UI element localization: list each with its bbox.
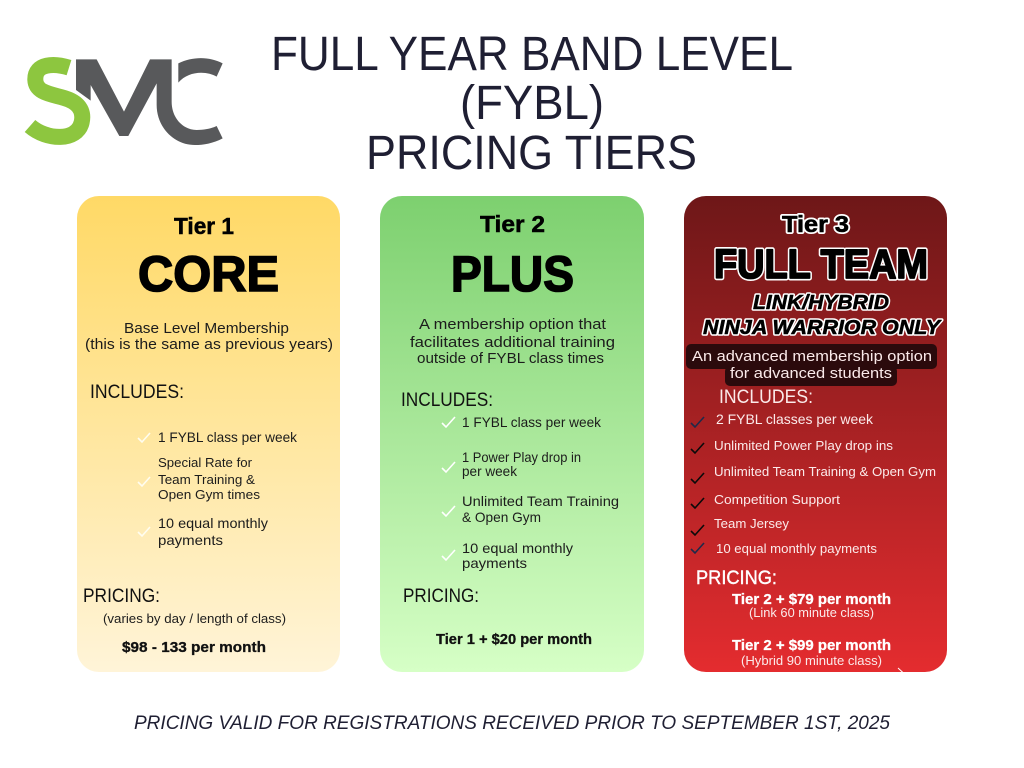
heading: Plus: PLUS [451,246,574,302]
includes list [138,429,298,548]
subheading: programs: LINK/HYBRID [753,292,889,314]
includes heading: INCLUDES: [90,382,184,403]
includes list [691,411,936,556]
includes list [442,414,619,571]
subheading: programs: NINJA WARRIOR ONLY [703,317,942,339]
heading: Full Team: FULL TEAM [714,241,928,287]
pricing heading: PRICING: [83,586,160,607]
includes list: 1 FYBL class per week [462,414,602,430]
logo: SMC [30,58,223,145]
pricing note: (varies by day / length of class) [103,611,286,626]
description: outside of FYBL class times [417,351,604,367]
description: A membership option that [419,317,606,333]
includes heading: INCLUDES: [719,387,813,408]
title: (FYBL) [460,77,604,130]
includes list: 10 equal monthly payments [716,541,878,556]
includes list: Unlimited Team Training & Open Gym [714,464,936,479]
pricing details [732,592,891,668]
heading: Full Team: FULL TEAM [714,241,928,287]
pricing heading: PRICING: [403,586,479,607]
panel: Tier 3 Full Team [684,196,947,674]
includes list: Team Jersey [714,516,789,531]
includes list: 1 Power Play drop in [462,449,581,465]
subheading: programs [703,292,942,339]
includes list: 10 equal monthly [462,540,573,556]
subheading: programs: LINK/HYBRID [753,292,889,314]
heading: Tier 2: Tier 2 [480,211,545,237]
includes list: Open Gym times [158,487,261,502]
includes list: per week [462,463,518,479]
includes list: Competition Support [714,492,840,507]
pricing heading: PRICING: [696,568,777,589]
price: Tier 1 + $20 per month [436,632,592,648]
description callout: An advanced membership option [692,349,932,365]
title [271,28,793,180]
description: Base Level Membership [124,321,289,337]
includes list: payments [158,532,223,548]
pricing details: Tier 2 + $99 per month [732,638,891,654]
heading: Core: CORE [138,246,279,302]
pricing details: Tier 2 + $79 per month [732,592,891,608]
includes list: Team Training & [158,472,255,487]
description [85,321,333,353]
pricing details: (Hybrid 90 minute class) [741,653,882,668]
title: PRICING TIERS [366,127,697,180]
includes list: 10 equal monthly [158,515,268,531]
description callout [686,344,937,386]
description [410,317,615,367]
subheading: programs: NINJA WARRIOR ONLY [703,317,942,339]
footer note: PRICING VALID FOR REGISTRATIONS RECEIVED PRIOR TO SEPTEMBER 1ST, 2025 [134,712,890,734]
price: $98 - 133 per month [122,640,266,656]
includes heading: INCLUDES: [401,390,493,411]
pricing details: (Link 60 minute class) [749,605,874,620]
description callout: for advanced students [730,366,892,382]
title: FULL YEAR BAND LEVEL [271,28,793,81]
includes list: payments [462,555,527,571]
includes list: Unlimited Team Training [462,493,619,509]
includes list: 2 FYBL classes per week [716,411,874,427]
includes list: Special Rate for [158,455,253,470]
panel: Tier 1 Core [77,196,340,672]
icon: clipped check fragment [898,668,904,674]
description: facilitates additional training [410,335,615,351]
panel: Tier 2 Plus [380,196,644,672]
heading: Tier 3: Tier 3 [782,211,849,237]
includes list: 1 FYBL class per week [158,429,298,445]
includes list: & Open Gym [462,509,541,525]
description: (this is the same as previous years) [85,337,333,353]
heading: Tier 1: Tier 1 [174,213,234,239]
includes list: Unlimited Power Play drop ins [714,438,894,453]
heading: Tier 3: Tier 3 [782,211,849,237]
